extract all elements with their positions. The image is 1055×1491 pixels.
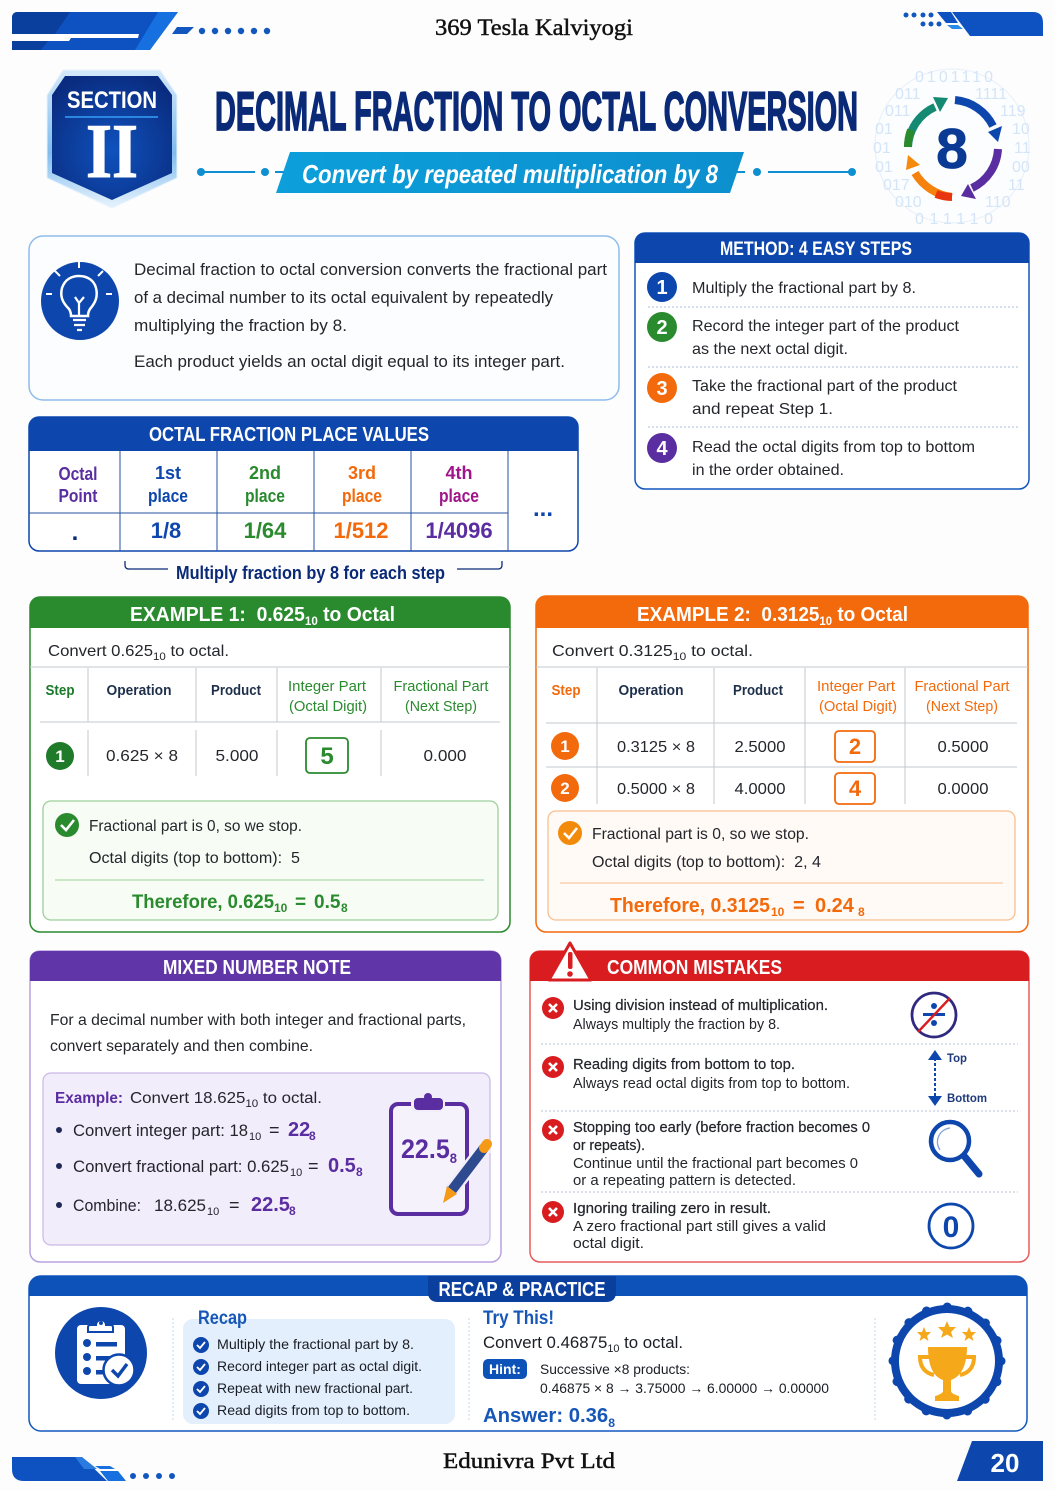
example 1 table header: Step bbox=[46, 683, 75, 699]
icon: cycle of multiplying by 8: 011 bbox=[885, 103, 911, 120]
try this exercise: Hint: bbox=[489, 1361, 521, 1377]
mixed number heading: MIXED NUMBER NOTE bbox=[163, 957, 351, 979]
example 1 result box: Fractional part is 0, so we stop. bbox=[89, 818, 302, 835]
note: multiply fraction by 8: Multiply fraction by 8 for each step bbox=[176, 563, 445, 583]
icon: cycle of multiplying by 8: 011 bbox=[895, 86, 921, 103]
example 2 prompt: 10 bbox=[673, 651, 686, 663]
panel: example 1 bbox=[30, 597, 510, 932]
column: 4th place bbox=[425, 463, 493, 543]
example 2 heading: 10 bbox=[819, 614, 832, 628]
panel: mixed number note bbox=[30, 951, 501, 1262]
example 2 result box: 8 bbox=[858, 905, 865, 919]
column: 4th place: 1/4096 bbox=[425, 518, 493, 543]
mixed number example box: 8 bbox=[289, 1204, 296, 1218]
example 2 row 1: 0.3125 × 8 bbox=[617, 739, 695, 756]
column: 3rd place: 1/512 bbox=[333, 518, 389, 543]
panel: introduction bbox=[29, 236, 619, 400]
intro text bbox=[134, 260, 607, 371]
example 1 prompt: Convert 0.625 bbox=[48, 643, 149, 660]
column: 2nd place: place bbox=[245, 486, 285, 506]
example 1 integer and fractional headers: Fractional Part bbox=[394, 679, 488, 695]
icon: magnifying glass bbox=[931, 1122, 979, 1174]
example 2 row 2: 4.0000 bbox=[734, 781, 786, 798]
example 1 prompt: to octal. bbox=[166, 643, 229, 660]
mistake 3 bbox=[542, 1119, 870, 1189]
step 3: 3 bbox=[656, 378, 668, 400]
mistake 4: octal digit. bbox=[573, 1236, 644, 1252]
mixed number example box: Convert 18.625 bbox=[130, 1090, 239, 1107]
try this exercise: 10 bbox=[607, 1343, 619, 1355]
example 2 result box: = bbox=[793, 895, 805, 917]
step 2: as the next octal digit. bbox=[692, 341, 848, 358]
try this exercise: 0.46875 × 8 → 3.75000 → 6.00000 → 0.00000 bbox=[540, 1380, 829, 1396]
icon: top to bottom arrow: Top bbox=[947, 1051, 967, 1065]
mixed number example box: 0.5 bbox=[328, 1155, 356, 1177]
page number tab: 20 bbox=[991, 1448, 1019, 1478]
example 2 row 2: 0.0000 bbox=[938, 781, 989, 798]
icon: cycle of multiplying by 8: 011110 bbox=[915, 211, 993, 228]
mixed number example box: 22 bbox=[288, 1119, 310, 1141]
example 1 result box: = bbox=[295, 892, 306, 913]
example 2 integer and fractional headers bbox=[817, 679, 1010, 715]
recap list: Record integer part as octal digit. bbox=[217, 1358, 422, 1374]
column: 2nd place: 2nd bbox=[249, 463, 281, 483]
example 1 result box: Octal digits (top to bottom): 5 bbox=[89, 850, 300, 867]
icon: cycle of multiplying by 8: 01 bbox=[873, 140, 891, 157]
example 2 row 1: 2 bbox=[849, 734, 861, 759]
mixed number example box: 22.5 bbox=[251, 1194, 290, 1216]
mixed number example box bbox=[43, 1073, 490, 1245]
method heading: METHOD: 4 EASY STEPS bbox=[720, 239, 912, 260]
icon: cycle of multiplying by 8: 017 bbox=[883, 177, 910, 194]
column: octal point: Point bbox=[58, 486, 98, 506]
try this exercise: Answer: 0.36 bbox=[483, 1405, 606, 1427]
mixed number example box: 8 bbox=[309, 1129, 316, 1143]
step 1: 1 bbox=[656, 277, 668, 299]
example 2 integer and fractional headers: Fractional Part bbox=[914, 679, 1010, 695]
column: 3rd place: 3rd bbox=[348, 463, 376, 483]
mistake 1: Always multiply the fraction by 8. bbox=[573, 1017, 780, 1033]
mistake 2 bbox=[542, 1056, 850, 1092]
example 1 prompt: 10 bbox=[153, 651, 166, 663]
mixed number example box: = bbox=[229, 1195, 240, 1215]
step 2: 2 bbox=[656, 317, 668, 339]
example 2 row 1: 0.5000 bbox=[938, 739, 989, 756]
example 2 row 1: 2.5000 bbox=[734, 739, 786, 756]
example 1 integer and fractional headers: Integer Part bbox=[288, 679, 366, 695]
example 2 result box bbox=[548, 811, 1015, 920]
panel: example 2 bbox=[536, 596, 1028, 932]
try this exercise: Successive ×8 products: bbox=[540, 1361, 690, 1377]
mixed number example box: to octal. bbox=[258, 1090, 322, 1107]
step 3: Take the fractional part of the product bbox=[692, 378, 958, 395]
mixed number example box: = bbox=[308, 1156, 319, 1176]
example 1 result box bbox=[43, 801, 498, 920]
step 1 bbox=[647, 272, 916, 302]
example 2 prompt: to octal. bbox=[686, 643, 753, 660]
example 2 prompt: Convert 0.3125 bbox=[552, 643, 661, 660]
recap heading: RECAP & PRACTICE bbox=[438, 1279, 606, 1301]
example 2 integer and fractional headers: Integer Part bbox=[817, 679, 895, 695]
panel: method steps bbox=[635, 233, 1029, 489]
icon: checklist clipboard bbox=[55, 1307, 147, 1399]
example 2 result box: Fractional part is 0, so we stop. bbox=[592, 826, 809, 843]
try this exercise bbox=[483, 1308, 829, 1430]
mixed number example box: 8 bbox=[356, 1165, 363, 1179]
icon: cycle of multiplying by 8: 01 bbox=[875, 121, 893, 138]
try this exercise: Convert 0.46875 bbox=[483, 1333, 609, 1352]
column: 1st place: 1st bbox=[155, 463, 181, 483]
column: 4th place: place bbox=[439, 486, 479, 506]
mixed number example box: 10 bbox=[249, 1131, 261, 1143]
mistake 3: Continue until the fractional part becomes 0 bbox=[573, 1156, 858, 1172]
icon: clipboard with pencil bbox=[391, 1093, 487, 1214]
example 2 row 2: 0.5000 × 8 bbox=[617, 781, 695, 798]
icon: top to bottom arrow bbox=[928, 1050, 987, 1106]
top-right header ornament bbox=[904, 12, 1043, 36]
example 2 table header: Operation bbox=[618, 683, 684, 699]
subtitle ribbon bbox=[197, 152, 856, 193]
example 1 row 1 bbox=[46, 738, 467, 773]
mistake 4: A zero fractional part still gives a valid bbox=[573, 1219, 826, 1235]
mistake 2: Always read octal digits from top to bottom. bbox=[573, 1076, 850, 1092]
step 3 bbox=[647, 373, 958, 418]
icon: cycle of multiplying by 8: 010 bbox=[895, 194, 922, 211]
example 2 integer and fractional headers: (Octal Digit) bbox=[819, 699, 897, 715]
example 2 result box: Therefore, 0.3125 bbox=[610, 895, 770, 917]
intro text: multiplying the fraction by 8. bbox=[134, 316, 347, 335]
column: 1st place: 1/8 bbox=[151, 518, 181, 543]
panel: common mistakes bbox=[530, 943, 1029, 1262]
recap list: Recap bbox=[198, 1308, 247, 1329]
example 1 row 1: 5 bbox=[320, 743, 334, 770]
recap list bbox=[183, 1308, 455, 1424]
intro text: Decimal fraction to octal conversion converts the fractional part bbox=[134, 260, 607, 279]
column: 2nd place bbox=[244, 463, 287, 543]
example 2 integer and fractional headers: (Next Step) bbox=[926, 699, 998, 715]
icon: clipboard with pencil: 8 bbox=[450, 1150, 457, 1166]
example 1 result box: 10 bbox=[274, 901, 288, 915]
mixed number explanation: For a decimal number with both integer and fractional parts, bbox=[50, 1012, 466, 1029]
example 1 row 1: 0.000 bbox=[424, 748, 467, 765]
example 1 result box: Therefore, 0.625 bbox=[132, 892, 274, 913]
recap list: Read digits from top to bottom. bbox=[217, 1402, 410, 1418]
icon: cycle of multiplying by 8 bbox=[873, 69, 1031, 228]
column: octal point bbox=[58, 464, 98, 546]
mixed number example box: Combine: bbox=[73, 1196, 141, 1215]
icon: warning triangle bbox=[549, 943, 591, 980]
mistake 3: or a repeating pattern is detected. bbox=[573, 1173, 796, 1189]
recap list: Multiply the fractional part by 8. bbox=[217, 1336, 414, 1352]
mixed number example box: 10 bbox=[207, 1206, 219, 1218]
icon: cycle of multiplying by 8: 11 bbox=[1008, 177, 1025, 194]
mixed number example box: 18.625 bbox=[154, 1196, 206, 1215]
step 2 bbox=[647, 312, 960, 358]
example 1 table header bbox=[46, 683, 261, 699]
mistakes heading: COMMON MISTAKES bbox=[607, 957, 782, 979]
mistake 3: Stopping too early (before fraction becomes 0 bbox=[573, 1120, 870, 1136]
top-left header ornament bbox=[12, 12, 270, 50]
example 2 result box: 10 bbox=[771, 905, 785, 919]
example 1 table header: Product bbox=[211, 683, 261, 699]
icon: cycle of multiplying by 8: 11 bbox=[1014, 140, 1031, 157]
column: 4th place: 4th bbox=[446, 463, 472, 483]
example 1 integer and fractional headers: (Next Step) bbox=[405, 699, 477, 715]
step 4 bbox=[647, 433, 975, 479]
step 1: Multiply the fractional part by 8. bbox=[692, 280, 916, 297]
mixed number example box: Convert integer part: 18 bbox=[73, 1121, 248, 1140]
example 2 row 1: 1 bbox=[560, 737, 570, 756]
example 2 row 2: 4 bbox=[849, 776, 862, 801]
footer ornament bbox=[12, 1457, 175, 1481]
icon: cycle of multiplying by 8: 10 bbox=[1012, 121, 1030, 138]
icon: cycle of multiplying by 8: 1111 bbox=[975, 86, 1007, 103]
icon: no division bbox=[912, 993, 956, 1037]
column: 1st place: place bbox=[148, 486, 188, 506]
icon: cycle of multiplying by 8: 119 bbox=[1000, 103, 1026, 120]
example 2 table header: Product bbox=[733, 683, 783, 699]
mistake 4 bbox=[542, 1201, 826, 1252]
example 1 table header: Operation bbox=[106, 683, 172, 699]
icon: cycle of multiplying by 8: 00 bbox=[1012, 159, 1030, 176]
mixed number example box: 10 bbox=[245, 1098, 258, 1110]
example 2 heading: EXAMPLE 2: 0.3125 bbox=[637, 604, 829, 626]
example 1 integer and fractional headers bbox=[288, 679, 488, 715]
mistake 3: or repeats). bbox=[573, 1138, 645, 1154]
try this exercise: 8 bbox=[608, 1416, 615, 1430]
icon: cycle of multiplying by 8: 01 bbox=[875, 159, 893, 176]
mistake 1 bbox=[542, 997, 828, 1033]
mistake 4: Ignoring trailing zero in result. bbox=[573, 1201, 771, 1217]
section badge: Section II bbox=[47, 70, 177, 208]
example 1 result box: 8 bbox=[341, 901, 348, 915]
footer text: Edunivra Pvt Ltd: Edunivra Pvt Ltd bbox=[443, 1448, 615, 1473]
step 4: in the order obtained. bbox=[692, 462, 844, 479]
column: octal point: Octal bbox=[58, 464, 98, 484]
header text: 369 Tesla Kalviyogi: 369 Tesla Kalviyogi bbox=[435, 15, 633, 40]
column: 3rd place: place bbox=[342, 486, 382, 506]
mixed number example box: 10 bbox=[290, 1167, 302, 1179]
mixed number example box: Convert fractional part: 0.625 bbox=[73, 1157, 289, 1176]
step 2: Record the integer part of the product bbox=[692, 318, 960, 335]
column: octal point: . bbox=[72, 519, 78, 546]
example 1 heading: to Octal bbox=[318, 604, 395, 626]
example 1 result box: 0.5 bbox=[314, 892, 341, 913]
example 2 result box: 0.24 bbox=[815, 895, 855, 917]
section badge: Section II: II bbox=[86, 108, 138, 194]
icon: cycle of multiplying by 8: 0101110 bbox=[915, 69, 993, 86]
icon: cycle of multiplying by 8: 110 bbox=[985, 194, 1011, 211]
icon: trophy medal bbox=[893, 1307, 1001, 1415]
intro text: Each product yields an octal digit equal to its integer part. bbox=[134, 352, 565, 371]
icon: light bulb bbox=[41, 262, 119, 340]
example 2 row 1 bbox=[551, 731, 989, 762]
step 4: Read the octal digits from top to bottom bbox=[692, 439, 975, 456]
mixed number explanation bbox=[50, 1012, 466, 1055]
icon: zero: 0 bbox=[943, 1211, 959, 1244]
mistake 1: Using division instead of multiplication. bbox=[573, 998, 828, 1014]
example 1 integer and fractional headers: (Octal Digit) bbox=[289, 699, 367, 715]
column: 2nd place: 1/64 bbox=[244, 518, 287, 543]
step 3: and repeat Step 1. bbox=[692, 401, 833, 418]
mixed number explanation: convert separately and then combine. bbox=[50, 1038, 313, 1055]
icon: cycle of multiplying by 8: 8 bbox=[936, 117, 968, 181]
example 1 heading: EXAMPLE 1: 0.625 bbox=[130, 604, 311, 626]
example 2 table header: Step bbox=[552, 683, 581, 699]
mixed number example box: Example: bbox=[55, 1090, 123, 1107]
mistake 2: Reading digits from bottom to top. bbox=[573, 1057, 795, 1073]
example 1 row 1: 1 bbox=[55, 747, 65, 766]
example 2 table header bbox=[552, 683, 783, 699]
intro text: of a decimal number to its octal equivalent by repeatedly bbox=[134, 288, 553, 307]
table heading: OCTAL FRACTION PLACE VALUES bbox=[149, 424, 429, 446]
example 2 row 2: 2 bbox=[560, 779, 570, 798]
page number tab bbox=[957, 1441, 1043, 1481]
recap list: Repeat with new fractional part. bbox=[217, 1380, 413, 1396]
subtitle ribbon: Convert by repeated multiplication by 8 bbox=[302, 159, 718, 189]
column: 1st place bbox=[148, 463, 188, 543]
column: 3rd place bbox=[333, 463, 389, 543]
panel: recap and practice bbox=[29, 1276, 1027, 1431]
try this exercise: Try This! bbox=[483, 1308, 554, 1329]
icon: zero bbox=[929, 1204, 973, 1248]
section badge: Section II: SECTION bbox=[67, 87, 157, 114]
example 1 heading: 10 bbox=[305, 614, 318, 628]
mixed number example box: = bbox=[269, 1120, 280, 1140]
example 2 result box: Octal digits (top to bottom): 2, 4 bbox=[592, 854, 821, 871]
step 4: 4 bbox=[656, 438, 668, 460]
ellipsis: ... bbox=[533, 495, 553, 522]
example 2 heading: to Octal bbox=[832, 604, 908, 626]
example 2 row 2 bbox=[551, 773, 989, 804]
example 1 row 1: 0.625 × 8 bbox=[106, 748, 178, 765]
example 1 row 1: 5.000 bbox=[216, 748, 259, 765]
icon: clipboard with pencil: 22.5 bbox=[401, 1134, 454, 1164]
panel: octal fraction place values table bbox=[29, 417, 578, 551]
icon: top to bottom arrow: Bottom bbox=[947, 1091, 987, 1105]
try this exercise: to octal. bbox=[619, 1333, 683, 1352]
